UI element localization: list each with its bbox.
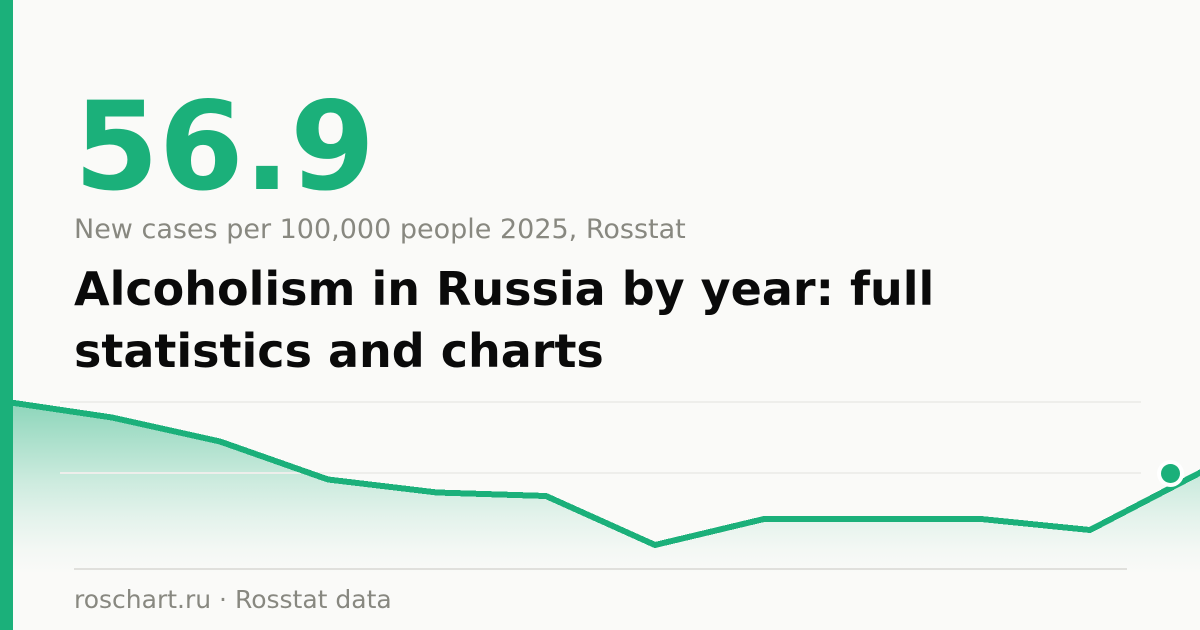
- big number: 56.9: [74, 76, 375, 218]
- chart area fill: [4, 402, 1200, 580]
- title: statistics and charts: [74, 324, 604, 378]
- trend line: [4, 402, 1200, 545]
- left accent bar: [0, 0, 13, 630]
- title: Alcoholism in Russia by year: full: [74, 262, 934, 316]
- baseline: [74, 568, 1127, 570]
- grid lines: [60, 402, 1141, 473]
- latest value marker: [1157, 460, 1184, 487]
- subtitle: New cases per 100,000 people 2025, Rosstat: [74, 214, 686, 245]
- footer source: roschart.ru · Rosstat data: [74, 585, 392, 614]
- title: [74, 262, 934, 378]
